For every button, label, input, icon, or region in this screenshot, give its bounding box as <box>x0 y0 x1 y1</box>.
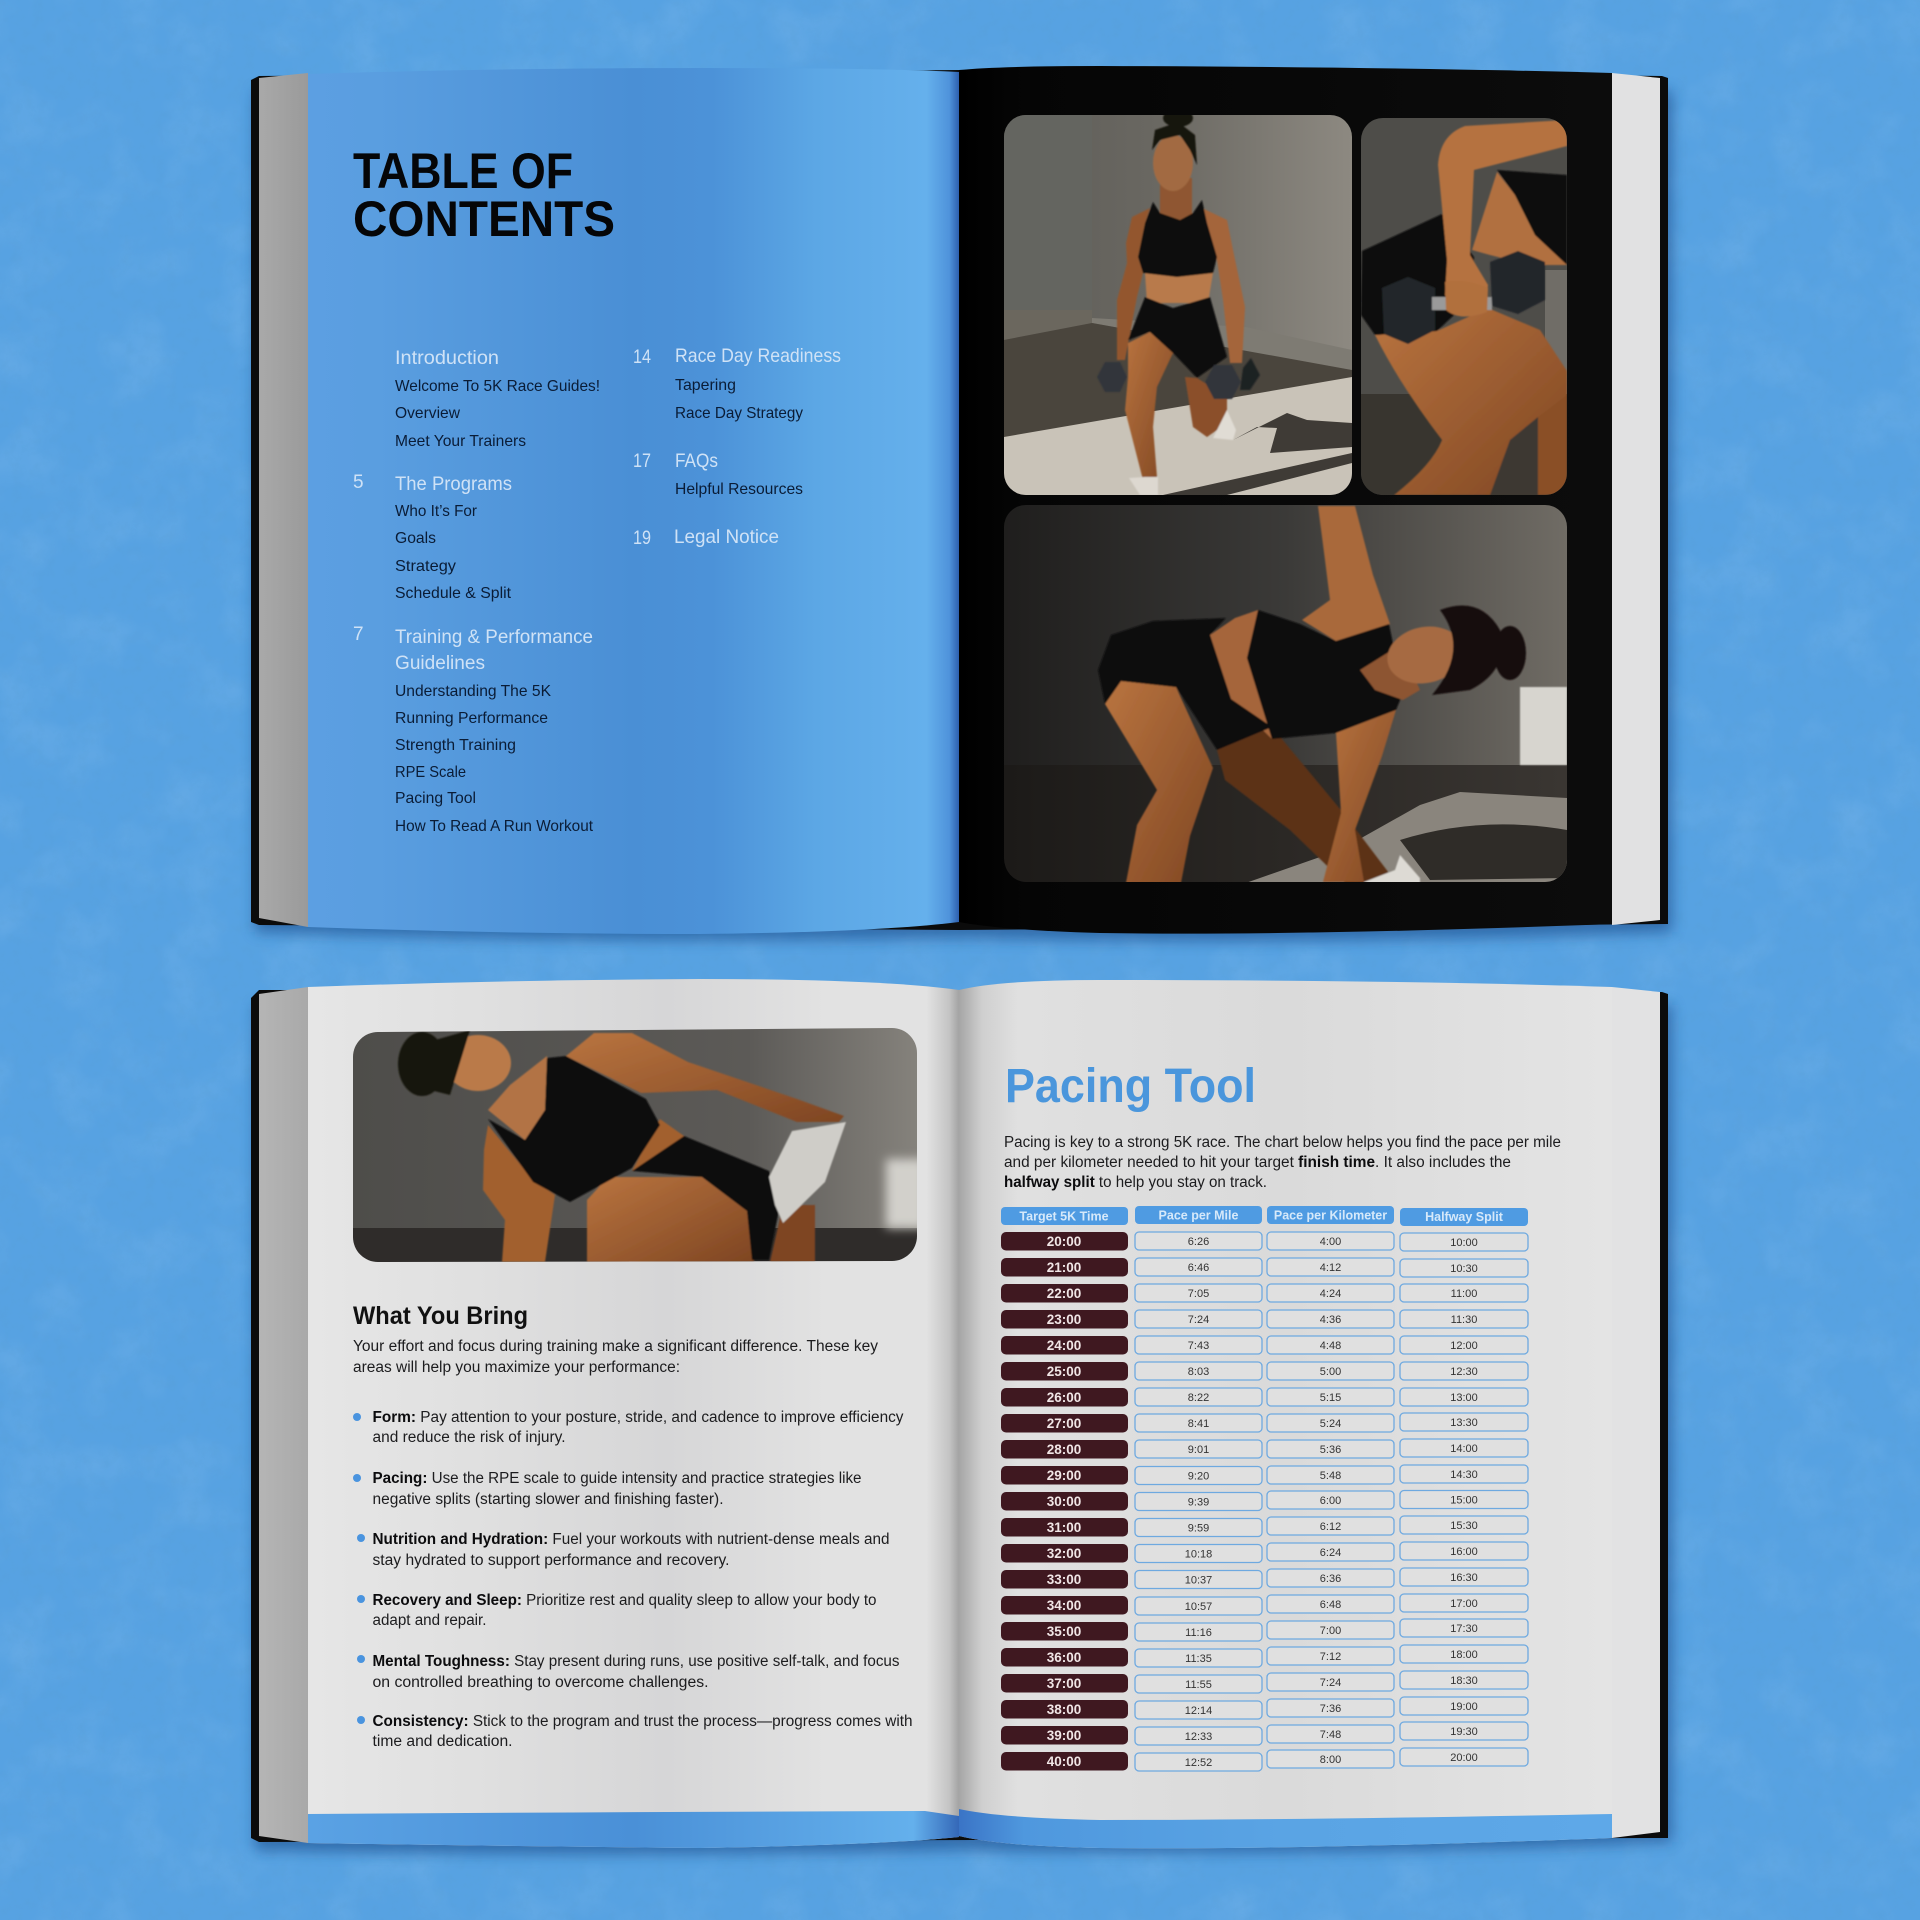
column: pace per mile: 11:35 <box>1185 1653 1212 1665</box>
contents column 2 <box>633 345 841 549</box>
bullet: nutrition and hydration: Nutrition and Hydration: Fuel your workouts with nutrient-dense meals and <box>372 1531 890 1548</box>
column: halfway split <box>1400 1233 1528 1766</box>
black photo page <box>959 66 1612 934</box>
intro paragraph <box>353 1338 878 1376</box>
back cover top <box>251 70 1668 930</box>
column: pace per kilometer: 6:36 <box>1320 1573 1341 1585</box>
bullet: form: Form: Pay attention to your posture, stride, and cadence to improve efficiency <box>372 1409 904 1426</box>
table header: Pace per Mile <box>1159 1208 1238 1222</box>
column: pace per mile: 9:59 <box>1188 1522 1209 1534</box>
contents column 1: 7 <box>353 624 364 645</box>
table header: Target 5K Time <box>1019 1210 1109 1224</box>
table header: Halfway Split <box>1425 1210 1504 1224</box>
column: pace per mile: 10:37 <box>1185 1574 1212 1586</box>
right page edges bottom <box>1612 987 1660 1838</box>
column: target 5K time: 33:00 <box>1047 1572 1081 1587</box>
bullet: nutrition and hydration <box>357 1531 890 1569</box>
column: halfway split: 16:30 <box>1450 1572 1478 1584</box>
bullet: recovery and sleep: adapt and repair. <box>372 1612 486 1629</box>
contents column 2: Race Day Strategy <box>675 405 803 422</box>
column: pace per mile: 9:39 <box>1188 1496 1209 1508</box>
column: pace per mile: 6:26 <box>1188 1236 1209 1248</box>
column: pace per kilometer <box>1267 1232 1394 1768</box>
contents column 2: Legal Notice <box>674 526 779 548</box>
column: target 5K time: 38:00 <box>1047 1702 1081 1717</box>
column: pace per kilometer: 6:48 <box>1320 1599 1341 1611</box>
contents column 2: Race Day Readiness <box>675 345 841 367</box>
left page edges bottom <box>259 987 308 1843</box>
column: pace per kilometer: 4:48 <box>1320 1340 1341 1352</box>
column: pace per kilometer: 7:48 <box>1320 1729 1341 1741</box>
contents column 1: Strategy <box>395 558 456 575</box>
column: halfway split: 19:00 <box>1450 1701 1478 1713</box>
column: pace per kilometer: 7:36 <box>1320 1703 1341 1715</box>
contents column 1 <box>353 347 600 835</box>
contents column 1: RPE Scale <box>395 764 466 781</box>
contents column 2: Helpful Resources <box>675 481 803 498</box>
column: target 5K time: 21:00 <box>1047 1260 1081 1275</box>
column: pace per mile: 11:16 <box>1185 1627 1212 1639</box>
column: pace per mile <box>1135 1232 1262 1771</box>
bullet: pacing: negative splits (starting slower and finishing faster). <box>372 1491 724 1508</box>
column: target 5K time: 31:00 <box>1047 1520 1081 1535</box>
column: pace per kilometer: 4:24 <box>1320 1288 1341 1300</box>
column: halfway split: 13:30 <box>1450 1417 1478 1429</box>
column: target 5K time: 28:00 <box>1047 1442 1081 1457</box>
table header: Pace per Kilometer <box>1274 1208 1387 1222</box>
column: pace per mile: 10:18 <box>1185 1548 1212 1560</box>
column: halfway split: 11:30 <box>1451 1314 1477 1326</box>
column: pace per kilometer: 6:24 <box>1320 1547 1341 1559</box>
column: pace per kilometer: 7:24 <box>1320 1677 1341 1689</box>
bullet: recovery and sleep: Recovery and Sleep: Prioritize rest and quality sleep to allow your body to <box>372 1592 876 1609</box>
contents column 1: How To Read A Run Workout <box>395 818 594 835</box>
photo: side lunge twist <box>1004 505 1567 888</box>
bullet: pacing <box>353 1470 862 1508</box>
pacing paragraph: halfway split to help you stay on track. <box>1004 1174 1267 1191</box>
contents column 1: Strength Training <box>395 737 516 754</box>
photo: lunge with dumbbells <box>1004 109 1352 495</box>
column: pace per kilometer: 4:00 <box>1320 1236 1341 1248</box>
column: pace per kilometer: 5:00 <box>1320 1366 1341 1378</box>
contents column 1: Schedule & Split <box>395 585 512 602</box>
column: halfway split: 10:00 <box>1450 1237 1478 1249</box>
column: halfway split: 15:30 <box>1450 1520 1478 1532</box>
table header <box>1001 1206 1528 1226</box>
column: pace per kilometer: 6:12 <box>1320 1521 1341 1533</box>
column: target 5K time: 40:00 <box>1047 1754 1081 1769</box>
column: target 5K time: 22:00 <box>1047 1286 1081 1301</box>
figure 2 <box>1375 308 1567 495</box>
blue strip left <box>308 1811 959 1848</box>
column: pace per kilometer: 7:00 <box>1320 1625 1341 1637</box>
title: TABLE OF <box>353 143 573 199</box>
column: pace per mile: 12:14 <box>1185 1705 1212 1717</box>
column: target 5K time: 20:00 <box>1047 1234 1081 1249</box>
contents column 2: 14 <box>633 347 651 368</box>
column: pace per kilometer: 5:48 <box>1320 1470 1341 1482</box>
figure 4 <box>483 1125 555 1262</box>
column: pace per mile: 9:20 <box>1188 1470 1209 1482</box>
bullet: mental toughness: on controlled breathing to overcome challenges. <box>372 1674 708 1691</box>
column: target 5K time: 37:00 <box>1047 1676 1081 1691</box>
column: pace per mile: 9:01 <box>1188 1444 1209 1456</box>
contents column 1: Introduction <box>395 347 499 369</box>
column: halfway split: 14:30 <box>1450 1469 1478 1481</box>
pacing paragraph: Pacing is key to a strong 5K race. The chart below helps you find the pace per mile <box>1004 1134 1561 1151</box>
left white page <box>308 979 959 1848</box>
bullet: consistency <box>357 1713 912 1750</box>
book: top spread <box>251 66 1672 941</box>
right white page <box>959 980 1612 1848</box>
photo: laughing stretch <box>353 1028 926 1262</box>
column: pace per kilometer: 5:15 <box>1320 1392 1341 1404</box>
column: halfway split: 12:30 <box>1450 1366 1478 1378</box>
column: pace per mile: 8:03 <box>1188 1366 1209 1378</box>
column: target 5K time: 36:00 <box>1047 1650 1081 1665</box>
column: halfway split: 18:00 <box>1450 1649 1478 1661</box>
column: pace per kilometer: 5:36 <box>1320 1444 1341 1456</box>
figure 3 <box>1217 727 1392 888</box>
contents column 1: Guidelines <box>395 652 485 674</box>
column: pace per mile: 6:46 <box>1188 1262 1209 1274</box>
column: pace per mile: 12:33 <box>1185 1731 1212 1743</box>
contents column 2: 17 <box>633 451 651 472</box>
column: pace per mile: 8:22 <box>1188 1392 1209 1404</box>
contents column 1: The Programs <box>395 473 512 495</box>
pacing paragraph <box>1004 1134 1561 1191</box>
left page edges top <box>259 73 308 927</box>
blue strip right <box>959 1809 1612 1848</box>
column: pace per mile: 7:05 <box>1188 1288 1209 1300</box>
column: halfway split: 10:30 <box>1450 1263 1478 1275</box>
book shadow top <box>255 90 1672 941</box>
column: pace per kilometer: 7:12 <box>1320 1651 1341 1663</box>
column: target 5K time: 39:00 <box>1047 1728 1081 1743</box>
column: halfway split: 20:00 <box>1450 1752 1478 1764</box>
contents column 1: Overview <box>395 405 460 422</box>
bullet: mental toughness: Mental Toughness: Stay present during runs, use positive self-talk, and focus <box>372 1653 900 1670</box>
column: halfway split: 11:00 <box>1451 1288 1477 1300</box>
pacing table <box>1001 1206 1528 1771</box>
column: halfway split: 15:00 <box>1450 1494 1478 1506</box>
heading what you bring: What You Bring <box>353 1302 528 1330</box>
column: pace per kilometer: 6:00 <box>1320 1495 1341 1507</box>
bullet: form <box>353 1409 904 1446</box>
right page edges top <box>1612 73 1660 925</box>
column: target 5K time: 25:00 <box>1047 1364 1081 1379</box>
bullet: consistency: Consistency: Stick to the program and trust the process—progress comes with <box>372 1713 912 1730</box>
bullet: nutrition and hydration: stay hydrated to support performance and recovery. <box>372 1552 730 1569</box>
column: pace per mile: 8:41 <box>1188 1418 1209 1430</box>
blue table of contents page <box>308 68 959 934</box>
contents column 1: Training & Performance <box>395 626 593 648</box>
column: target 5K time: 24:00 <box>1047 1338 1081 1353</box>
column: pace per kilometer: 5:24 <box>1320 1418 1341 1430</box>
column: pace per mile: 7:43 <box>1188 1340 1209 1352</box>
book: bottom spread <box>251 979 1672 1854</box>
column: pace per kilometer: 4:36 <box>1320 1314 1341 1326</box>
contents column 1: Pacing Tool <box>395 790 476 807</box>
column: target 5K time: 26:00 <box>1047 1390 1081 1405</box>
contents column 1: Running Performance <box>395 710 548 727</box>
back cover bottom <box>251 990 1668 1842</box>
column: pace per mile: 12:52 <box>1185 1757 1212 1769</box>
bullet: form: and reduce the risk of injury. <box>372 1429 566 1446</box>
column: halfway split: 17:00 <box>1450 1598 1478 1610</box>
bullet: pacing: Pacing: Use the RPE scale to guide intensity and practice strategies like <box>372 1470 862 1487</box>
contents column 1: Welcome To 5K Race Guides! <box>395 378 600 395</box>
column: pace per kilometer: 8:00 <box>1320 1754 1341 1766</box>
column: target 5K time: 34:00 <box>1047 1598 1081 1613</box>
title <box>353 143 615 247</box>
bullet: consistency: time and dedication. <box>372 1733 512 1750</box>
pacing paragraph: and per kilometer needed to hit your target finish time. It also includes the <box>1004 1154 1511 1171</box>
figure 1 <box>1185 377 1227 437</box>
bullet: recovery and sleep <box>357 1592 876 1629</box>
column: target 5K time: 27:00 <box>1047 1416 1081 1431</box>
column: target 5K time: 35:00 <box>1047 1624 1081 1639</box>
contents column 2: Tapering <box>675 377 736 394</box>
contents column 2: 19 <box>633 528 651 549</box>
column: halfway split: 17:30 <box>1450 1623 1478 1635</box>
bullet: mental toughness <box>357 1653 900 1691</box>
column: target 5K time: 29:00 <box>1047 1468 1081 1483</box>
intro paragraph: areas will help you maximize your performance: <box>353 1359 680 1376</box>
column: pace per mile: 10:57 <box>1185 1601 1212 1613</box>
contents column 2: FAQs <box>675 450 718 472</box>
intro paragraph: Your effort and focus during training make a significant difference. These key <box>353 1338 878 1355</box>
column: target 5K time: 32:00 <box>1047 1546 1081 1561</box>
bullet list <box>353 1409 912 1750</box>
title: CONTENTS <box>353 191 615 247</box>
contents column 1: Meet Your Trainers <box>395 433 526 450</box>
column: pace per kilometer: 4:12 <box>1320 1262 1341 1274</box>
book shadow bottom <box>255 1005 1672 1854</box>
column: pace per mile: 7:24 <box>1188 1314 1209 1326</box>
contents column 1: Who It’s For <box>395 503 478 520</box>
column: halfway split: 18:30 <box>1450 1675 1478 1687</box>
column: pace per mile: 11:55 <box>1185 1679 1212 1691</box>
column: halfway split: 12:00 <box>1450 1340 1478 1352</box>
contents column 1: 5 <box>353 472 364 493</box>
contents column 1: Understanding The 5K <box>395 683 551 700</box>
column: target 5K time: 30:00 <box>1047 1494 1081 1509</box>
photo: dumbbell row <box>1361 118 1567 495</box>
column: halfway split: 14:00 <box>1450 1443 1478 1455</box>
column: target 5K time <box>1001 1232 1128 1770</box>
column: target 5K time: 23:00 <box>1047 1312 1081 1327</box>
heading pacing tool: Pacing Tool <box>1005 1060 1256 1113</box>
contents column 1: Goals <box>395 530 436 547</box>
column: halfway split: 13:00 <box>1450 1392 1478 1404</box>
column: halfway split: 19:30 <box>1450 1726 1478 1738</box>
column: halfway split: 16:00 <box>1450 1546 1478 1558</box>
